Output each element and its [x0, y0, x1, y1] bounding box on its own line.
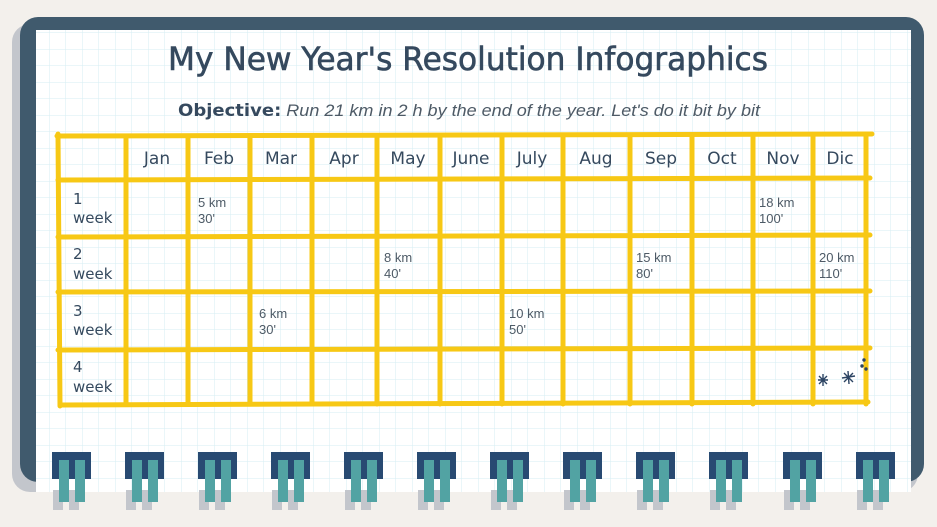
- training entries: 80': [636, 266, 653, 281]
- month headers: Apr: [329, 149, 359, 169]
- training entries: 8 km: [384, 250, 412, 265]
- objective: Objective: Run 21 km in 2 h by the end of the year. Let's do it bit by bit: [178, 101, 761, 121]
- month headers: May: [390, 149, 426, 169]
- training entries: 30': [198, 211, 215, 226]
- week labels: week: [73, 378, 113, 396]
- training entries: 20 km: [819, 250, 854, 265]
- month headers: Jan: [143, 149, 170, 169]
- week labels: 1: [73, 190, 83, 208]
- training entries: 18 km: [759, 195, 794, 210]
- training entries: 10 km: [509, 306, 544, 321]
- month headers: Sep: [645, 149, 677, 169]
- training entries: 6 km: [259, 306, 287, 321]
- week labels: week: [73, 209, 113, 227]
- spiral rings: [52, 452, 91, 510]
- month headers: Oct: [707, 149, 737, 169]
- training entries: 40': [384, 266, 401, 281]
- month headers: Mar: [265, 149, 297, 169]
- month headers: June: [451, 149, 490, 169]
- training entries: [198, 195, 854, 337]
- month headers: Feb: [204, 149, 234, 169]
- week labels: week: [73, 265, 113, 283]
- title: My New Year's Resolution Infographics: [168, 40, 768, 78]
- training entries: 50': [509, 322, 526, 337]
- month headers: Dic: [826, 149, 854, 169]
- month headers: Aug: [579, 149, 613, 169]
- week labels: 3: [73, 302, 83, 320]
- training entries: 5 km: [198, 195, 226, 210]
- month headers: Nov: [766, 149, 800, 169]
- training entries: 30': [259, 322, 276, 337]
- week labels: week: [73, 321, 113, 339]
- week labels: 2: [73, 245, 83, 263]
- training entries: 110': [819, 266, 842, 281]
- week labels: 4: [73, 358, 83, 376]
- week labels: [73, 190, 113, 396]
- month headers: July: [516, 149, 547, 169]
- icon: sparkles: [818, 359, 867, 386]
- month headers: [143, 149, 854, 169]
- training entries: 100': [759, 211, 783, 226]
- calendar table: [57, 134, 872, 406]
- training entries: 15 km: [636, 250, 671, 265]
